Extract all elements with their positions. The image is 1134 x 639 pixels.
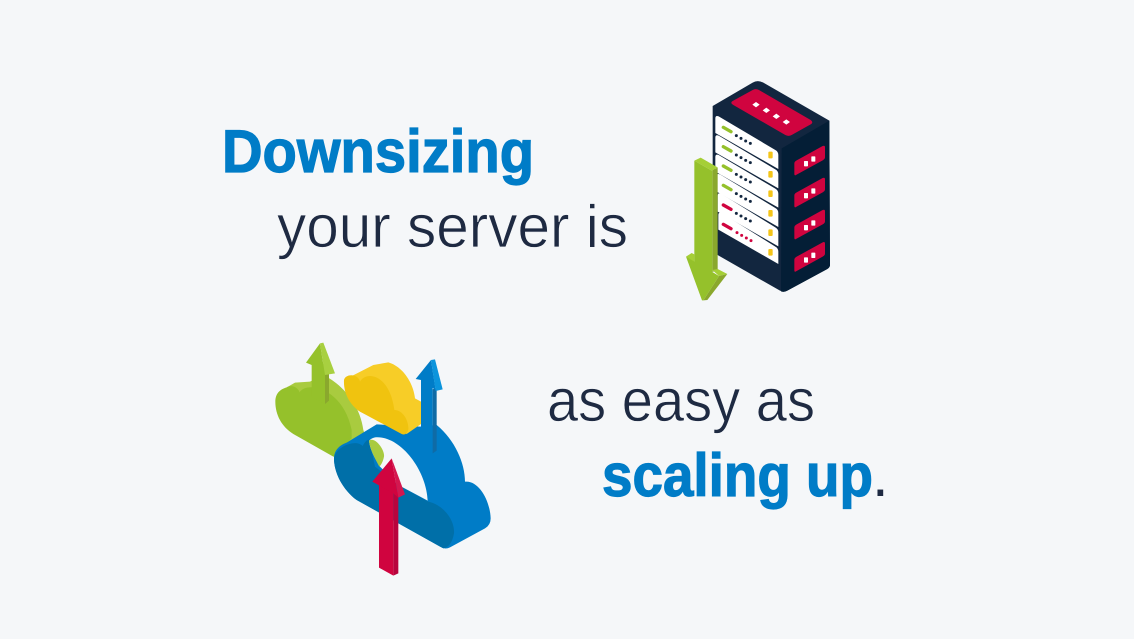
server top panel xyxy=(731,89,812,136)
cloud opening xyxy=(369,437,428,501)
headline: Downsizing: Downsizing xyxy=(222,118,534,185)
arrow: green down xyxy=(686,158,727,300)
arrow: red up xyxy=(372,458,405,576)
blue cloud xyxy=(334,424,491,549)
green cloud xyxy=(275,375,367,458)
green cloud seen through opening xyxy=(369,440,384,467)
text: full stop: . xyxy=(872,442,889,509)
icon: server rack with down arrow xyxy=(686,81,830,300)
arrow: green up xyxy=(306,343,335,404)
icon: clouds with up arrows xyxy=(275,343,491,576)
server drive slots xyxy=(715,116,778,264)
side red panels xyxy=(794,146,825,272)
server body xyxy=(713,81,830,292)
text: as easy as: as easy as xyxy=(547,367,815,434)
text: your server is: your server is xyxy=(277,193,628,260)
yellow cloud xyxy=(344,362,421,434)
headline: scaling up: scaling up xyxy=(602,442,873,509)
status lights xyxy=(723,127,773,256)
arrow: blue up xyxy=(416,359,443,453)
